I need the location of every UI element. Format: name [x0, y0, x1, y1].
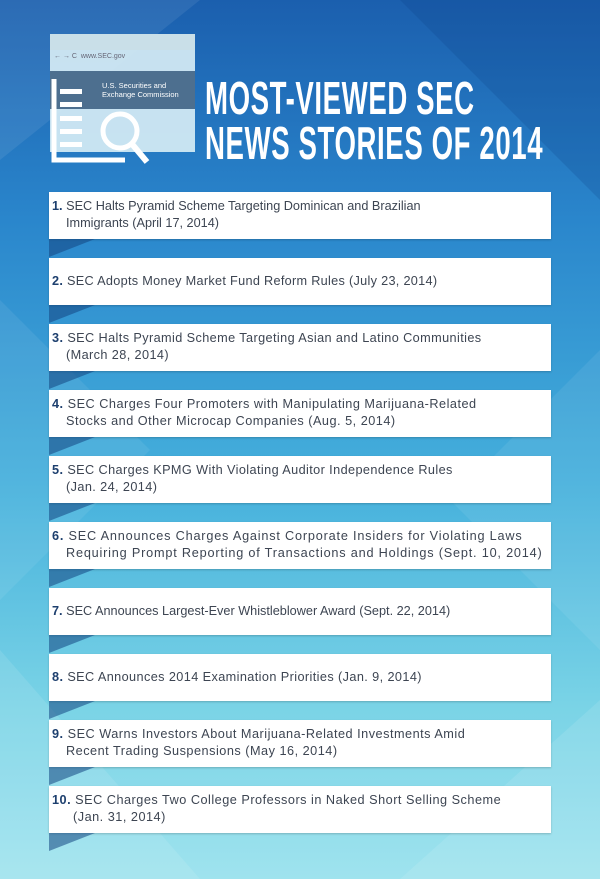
- title: NEWS STORIES OF 2014: [205, 117, 543, 169]
- story 2: 2. SEC Adopts Money Market Fund Reform Rules (July 23, 2014): [52, 274, 437, 288]
- story 9: [49, 720, 551, 767]
- story 10: (Jan. 31, 2014): [73, 810, 166, 824]
- icon: SEC website browser: U.S. Securities and: [102, 81, 166, 90]
- story 5: 5. SEC Charges KPMG With Violating Auditor Independence Rules: [52, 463, 453, 477]
- icon: SEC website browser: Exchange Commission: [102, 90, 179, 99]
- panel: story list: [48, 192, 552, 851]
- story 4: [49, 390, 551, 437]
- story 8: 8. SEC Announces 2014 Examination Priorities (Jan. 9, 2014): [52, 670, 422, 684]
- title: [205, 72, 543, 169]
- story 2: [49, 258, 551, 305]
- story 6: 6. SEC Announces Charges Against Corporate Insiders for Violating Laws: [52, 529, 522, 543]
- story 1: 1. SEC Halts Pyramid Scheme Targeting Dominican and Brazilian: [52, 199, 421, 213]
- story 7: 7. SEC Announces Largest-Ever Whistleblower Award (Sept. 22, 2014): [52, 604, 450, 618]
- story 4: 4. SEC Charges Four Promoters with Manipulating Marijuana-Related: [52, 397, 477, 411]
- story 1: [49, 192, 551, 239]
- icon: SEC website browser: ← → C www.SEC.gov: [54, 53, 125, 60]
- story 4: Stocks and Other Microcap Companies (Aug. 5, 2014): [66, 414, 396, 428]
- story 3: [49, 324, 551, 371]
- story 9: Recent Trading Suspensions (May 16, 2014): [66, 744, 338, 758]
- story 6: [49, 522, 551, 569]
- story 3: 3. SEC Halts Pyramid Scheme Targeting Asian and Latino Communities: [52, 331, 482, 345]
- story 7: [49, 588, 551, 635]
- story 5: (Jan. 24, 2014): [66, 480, 157, 494]
- icon: SEC website browser: [50, 34, 195, 164]
- story 10: [49, 786, 551, 833]
- title: MOST-VIEWED SEC: [205, 72, 475, 124]
- story 5: [49, 456, 551, 503]
- story 3: (March 28, 2014): [66, 348, 169, 362]
- story 8: [49, 654, 551, 701]
- story 6: Requiring Prompt Reporting of Transactions and Holdings (Sept. 10, 2014): [66, 546, 543, 560]
- story 10: 10. SEC Charges Two College Professors in Naked Short Selling Scheme: [52, 793, 501, 807]
- story 1: Immigrants (April 17, 2014): [66, 216, 219, 230]
- story 9: 9. SEC Warns Investors About Marijuana-Related Investments Amid: [52, 727, 465, 741]
